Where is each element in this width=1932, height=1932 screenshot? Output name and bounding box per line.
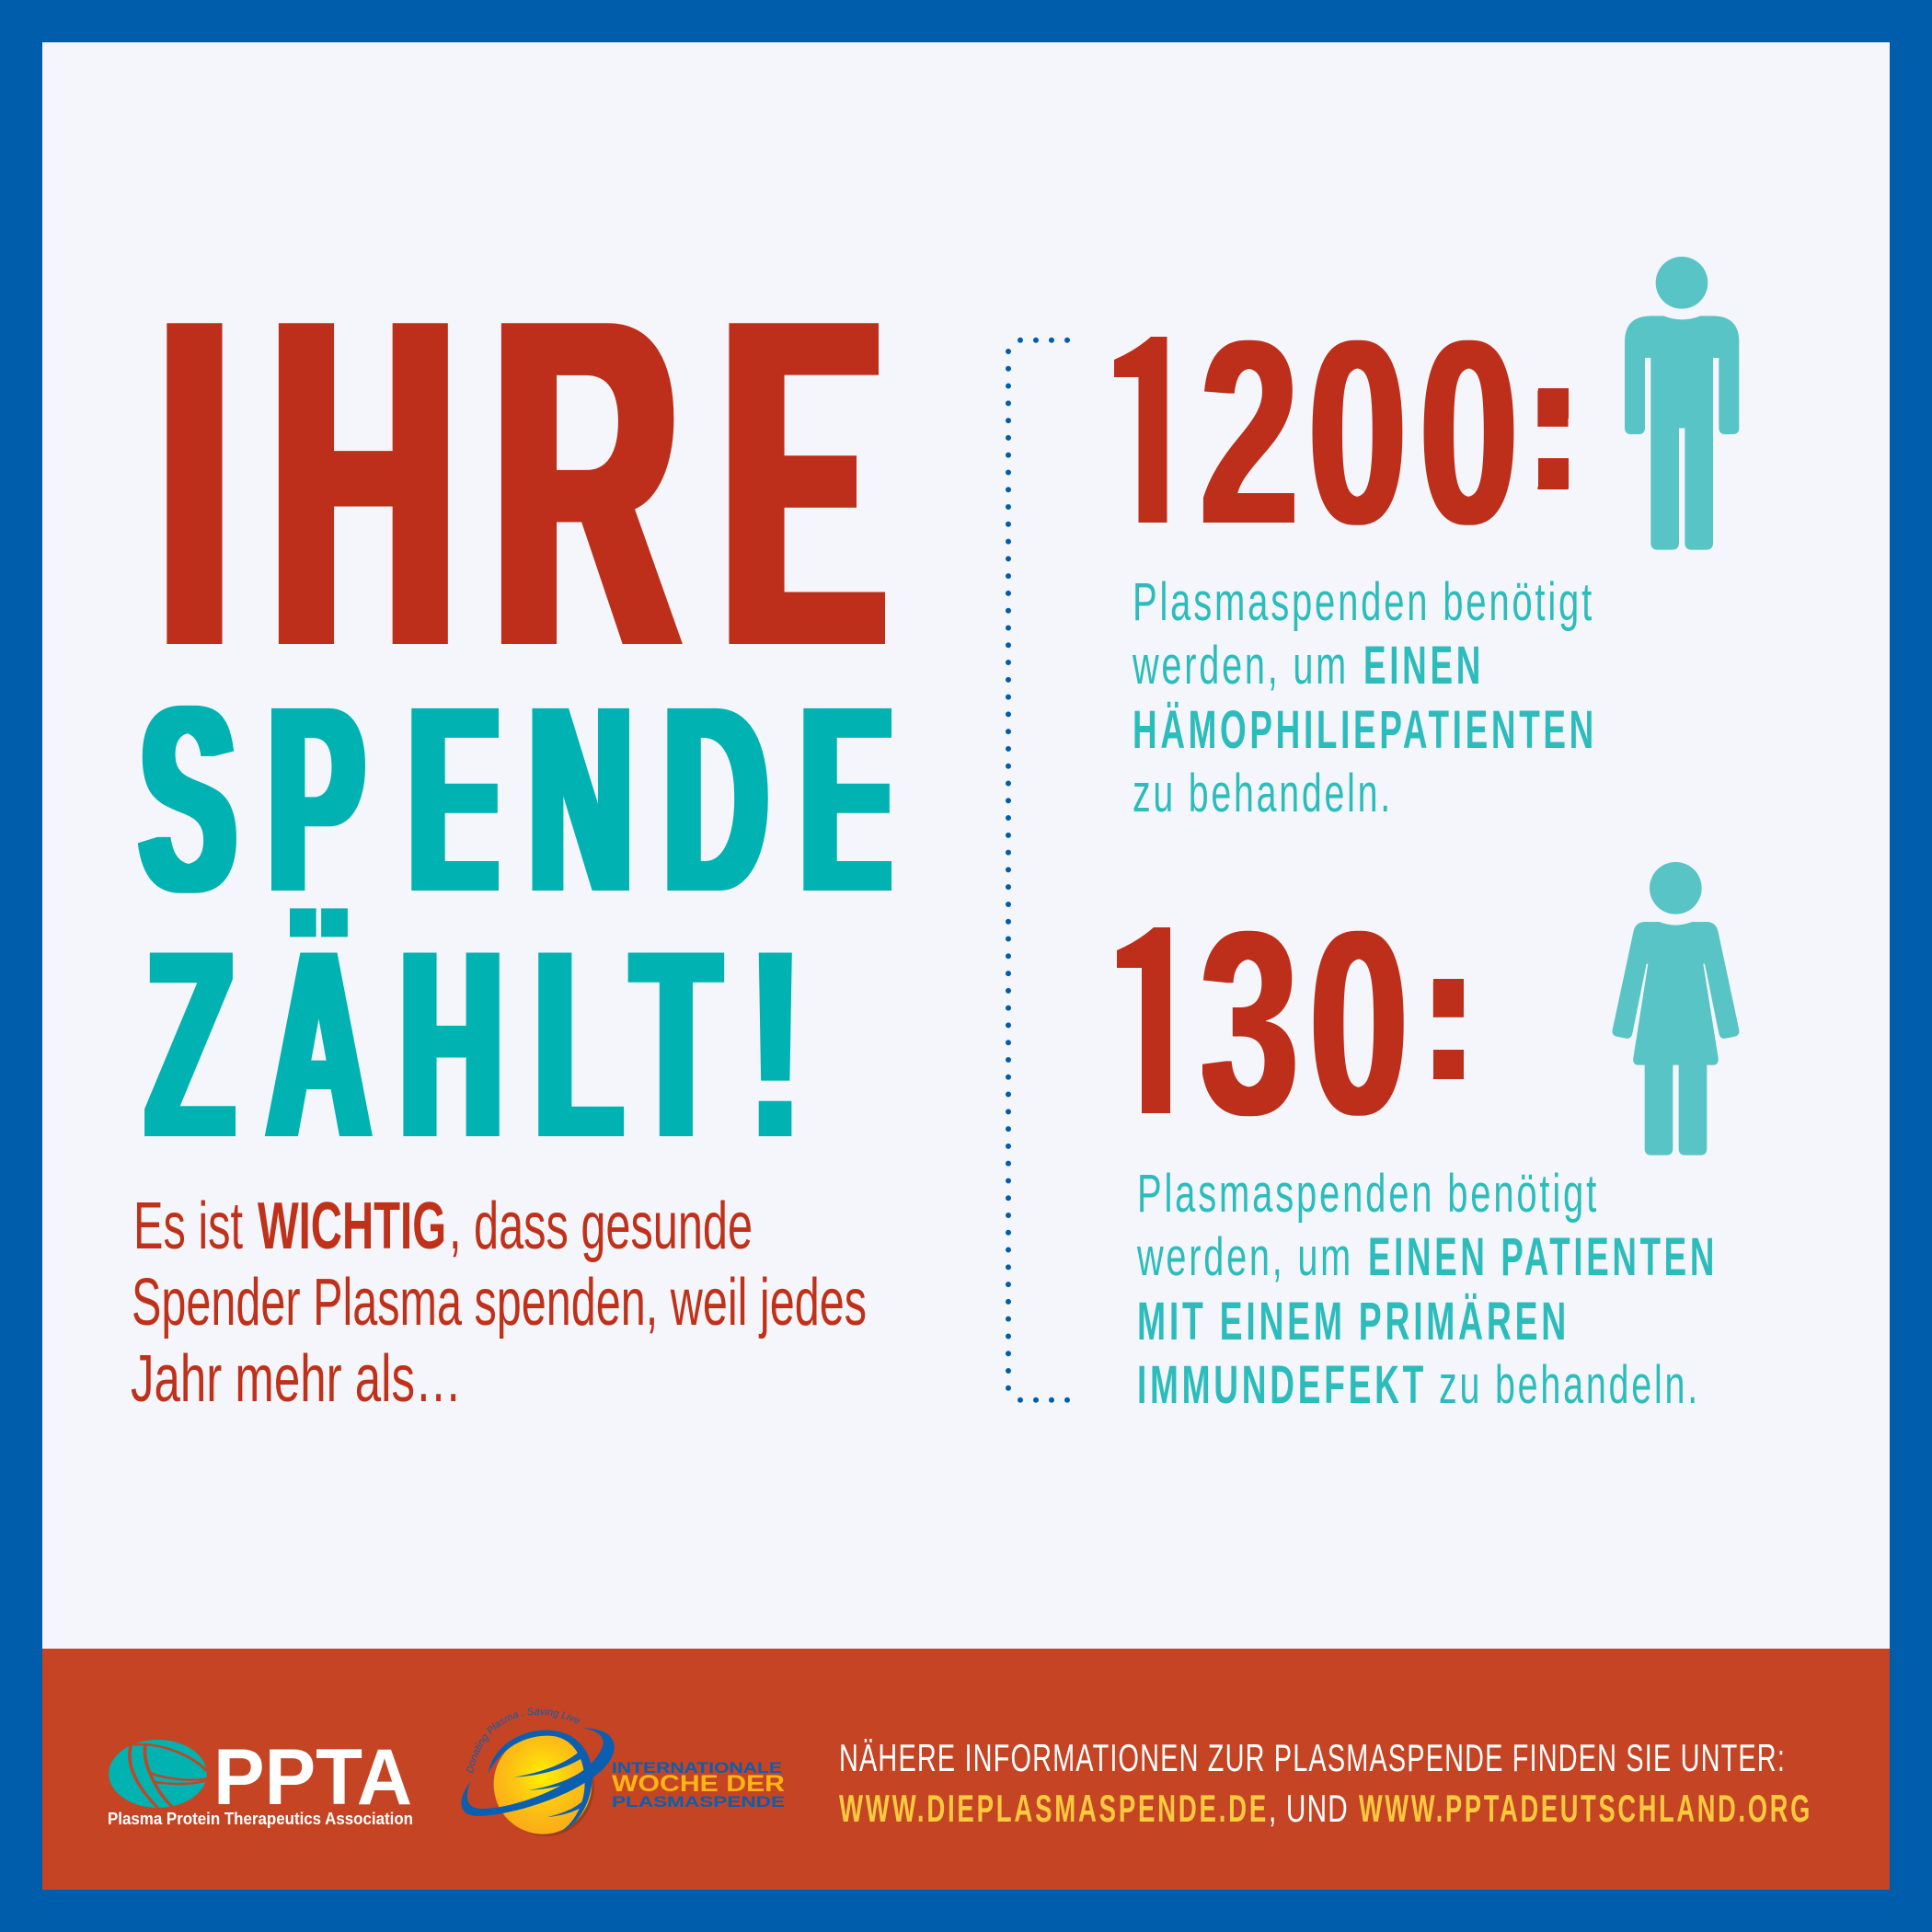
icon: man bbox=[1625, 257, 1739, 550]
intro paragraph: , dass gesunde bbox=[449, 1190, 753, 1263]
text block: immune deficiency patient: MIT EINEM PRIMÄREN bbox=[1137, 1292, 1570, 1351]
headline: ZÄHLT!: ZÄHLT! bbox=[147, 896, 799, 1193]
headline: SPENDE: SPENDE bbox=[140, 651, 896, 948]
text block: hemophilia patient bbox=[1132, 572, 1597, 823]
logo tagline: Plasma Protein Therapeutics Association bbox=[108, 1810, 413, 1828]
statistic: 130: 130: bbox=[1104, 878, 1478, 1169]
intro paragraph: Es ist bbox=[133, 1190, 243, 1263]
text block: immune deficiency patient bbox=[1136, 1164, 1718, 1415]
text block: immune deficiency patient: Plasmaspenden benötigt bbox=[1137, 1164, 1599, 1224]
text block: immune deficiency patient: werden, um bbox=[1136, 1227, 1353, 1287]
text block: immune deficiency patient: IMMUNDEFEKT bbox=[1137, 1355, 1427, 1415]
icon: woman bbox=[1613, 862, 1739, 1156]
headline: IHRE: IHRE bbox=[159, 223, 892, 743]
intro paragraph: Spender Plasma spenden, weil jedes bbox=[132, 1266, 867, 1340]
footer band bbox=[42, 1649, 1890, 1890]
logo: PPTA bbox=[108, 1733, 413, 1828]
footer information text: WWW.DIEPLASMASPENDE.DE bbox=[839, 1787, 1269, 1830]
logo: international plasma week: PLASMASPENDE bbox=[612, 1794, 785, 1811]
footer information text: , UND bbox=[1269, 1787, 1349, 1830]
logo sun with orbit bbox=[461, 1728, 615, 1836]
dotted bracket bbox=[1008, 340, 1068, 1400]
statistic: 1200: 1200: bbox=[1101, 287, 1582, 579]
intro paragraph bbox=[131, 1190, 867, 1416]
logo wordmark: PPTA bbox=[213, 1733, 412, 1822]
logo: international plasma week: WOCHE DER bbox=[612, 1771, 785, 1797]
text block: hemophilia patient: HÄMOPHILIEPATIENTEN bbox=[1133, 700, 1597, 760]
intro paragraph: WICHTIG bbox=[258, 1190, 446, 1263]
text block: immune deficiency patient: zu behandeln. bbox=[1439, 1355, 1700, 1415]
text block: immune deficiency patient: EINEN PATIENTEN bbox=[1368, 1227, 1718, 1287]
footer information text bbox=[839, 1736, 1812, 1830]
logo text: INTERNATIONALE bbox=[612, 1760, 782, 1777]
light content panel bbox=[42, 42, 1890, 1649]
text block: hemophilia patient: Plasmaspenden benötigt bbox=[1133, 572, 1594, 632]
intro paragraph: Jahr mehr als… bbox=[131, 1342, 462, 1416]
logo arc motto: Donating Plasma . Saving Lives bbox=[466, 1708, 580, 1774]
text block: hemophilia patient: werden, um bbox=[1132, 636, 1349, 696]
logo globe bbox=[109, 1740, 207, 1808]
logo: international plasma week bbox=[461, 1708, 785, 1836]
text block: hemophilia patient: EINEN bbox=[1363, 636, 1484, 696]
text block: hemophilia patient: zu behandeln. bbox=[1133, 764, 1393, 823]
